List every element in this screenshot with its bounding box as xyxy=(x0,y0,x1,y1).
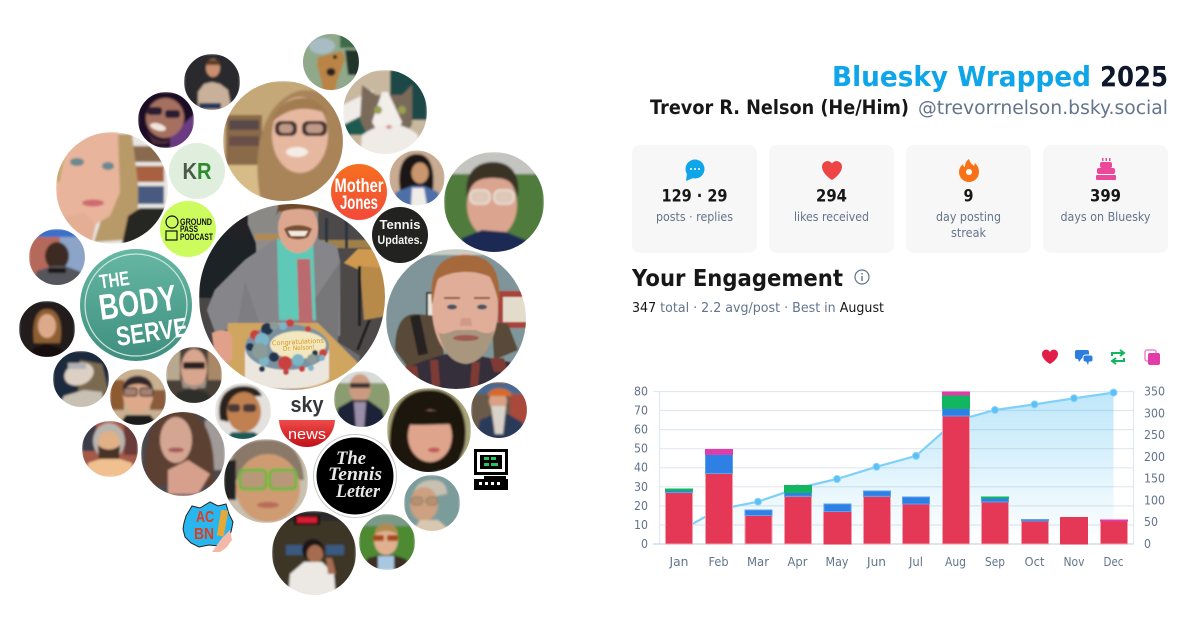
avatar: Sky News logo: sky xyxy=(290,392,324,417)
avatar: Mother Jones logo: Jones xyxy=(340,193,378,214)
stat card: posts and replies xyxy=(632,145,757,253)
title: Bluesky Wrapped xyxy=(832,60,1091,93)
left axis labels: 20 xyxy=(634,499,648,513)
stacked bars xyxy=(666,392,1128,544)
stat card: posting streak: 9 xyxy=(964,186,974,206)
avatar: man with clear glasses, hedge xyxy=(444,152,544,256)
right axis labels: 0 xyxy=(1144,537,1151,551)
avatar: Tennis Updates logo: Tennis xyxy=(380,217,420,232)
avatar: woman with green glasses and headphones xyxy=(224,439,308,523)
display name: Trevor R. Nelson (He/Him) xyxy=(650,96,909,119)
icon: quotes legend xyxy=(1145,350,1160,365)
avatar: Ground Pass Podcast logo: GROUND xyxy=(180,217,212,227)
stat card: posts and replies: posts · replies xyxy=(656,209,733,224)
avatar: bald man with beard, bookshelf xyxy=(166,347,222,404)
avatar: AC BN comic logo xyxy=(183,502,233,552)
left axis labels: 60 xyxy=(634,422,648,436)
stat card: days on Bluesky: days on Bluesky xyxy=(1060,209,1151,224)
avatar: The Body Serve logo: SERVE xyxy=(114,312,190,352)
left axis labels: 40 xyxy=(634,460,648,474)
avatar: Tennis Updates logo xyxy=(372,207,428,263)
icon: replies legend xyxy=(1075,350,1093,365)
avatar: KR initials: KR xyxy=(182,158,212,184)
right axis labels: 250 xyxy=(1144,428,1165,442)
engagement chart xyxy=(634,384,1165,569)
avatar: Mother Jones logo xyxy=(331,164,387,220)
month labels: Jul xyxy=(908,555,923,569)
avatar: Ground Pass Podcast logo xyxy=(160,201,216,257)
cumulative area xyxy=(679,393,1114,544)
avatar: man in dark studio xyxy=(184,54,240,112)
grid lines xyxy=(653,392,1134,544)
icon: flame xyxy=(959,159,979,182)
right axis labels: 50 xyxy=(1144,515,1158,529)
stat card: days on Bluesky xyxy=(1043,145,1168,253)
avatar: main profile photo with cake: Congratulations xyxy=(272,337,325,347)
avatar: bald man with glasses, purple xyxy=(138,92,194,148)
avatar: woman laughing in studio xyxy=(272,511,356,600)
left axis labels: 80 xyxy=(634,384,648,398)
avatar: woman with wavy brown hair xyxy=(141,410,225,496)
icon: info xyxy=(855,270,869,284)
stat card: likes received: likes received xyxy=(794,209,869,224)
avatar: person laughing upward xyxy=(53,351,109,408)
left axis labels: 70 xyxy=(634,404,648,418)
avatar: Ground Pass Podcast logo: PASS xyxy=(180,224,198,234)
avatar: woman with long dark hair xyxy=(389,150,445,206)
right axis labels: 300 xyxy=(1144,406,1165,420)
avatar: Sky News logo: news xyxy=(288,426,326,443)
avatar: The Body Serve logo xyxy=(80,249,192,361)
right axis labels: 150 xyxy=(1144,472,1165,486)
left axis labels: 0 xyxy=(641,537,648,551)
avatar: The Body Serve logo: THE xyxy=(98,268,131,294)
icon: pixel computer avatar xyxy=(474,449,508,490)
avatar: woman with glasses, bookshelf xyxy=(223,81,344,206)
avatar: Tennis Updates logo: Updates. xyxy=(378,233,422,247)
month labels: Feb xyxy=(708,555,728,569)
right axis labels: 350 xyxy=(1144,384,1165,398)
month labels: Dec xyxy=(1104,555,1124,569)
icon: heart xyxy=(822,161,842,180)
left axis labels: 10 xyxy=(634,518,648,532)
month labels: Nov xyxy=(1064,555,1084,569)
avatar: woman on dark background xyxy=(19,301,75,358)
avatar: main profile photo with cake: Dr. Nelson! xyxy=(283,343,315,353)
month labels: Jun xyxy=(866,555,886,569)
avatar: The Body Serve logo: BODY xyxy=(96,277,179,328)
avatar: KR initials xyxy=(169,143,225,199)
heading: Your Engagement: Your Engagement xyxy=(631,264,843,292)
cumulative line xyxy=(679,393,1114,531)
avatar: main profile photo with cake xyxy=(199,202,390,390)
stat card: likes received: 294 xyxy=(816,186,847,206)
avatar bubble cluster xyxy=(19,32,544,600)
icon: reposts legend xyxy=(1112,350,1124,364)
stat card: posting streak: streak xyxy=(951,225,987,240)
avatar: bald man in suit xyxy=(334,371,390,428)
month labels: Aug xyxy=(945,555,966,569)
avatar: person with light hair and round glasses xyxy=(404,475,460,532)
left axis labels: 50 xyxy=(634,442,648,456)
icon: chat bubble xyxy=(686,160,704,181)
avatar: woman with dark bangs xyxy=(387,388,471,474)
avatar: bearded man in orange hat xyxy=(471,382,528,440)
avatar: Sky News logo xyxy=(279,396,335,447)
avatar: tabby cat xyxy=(343,70,427,157)
left axis labels xyxy=(634,384,648,551)
avatar: bearded cartoon mascot xyxy=(82,421,138,477)
right axis labels: 200 xyxy=(1144,450,1165,464)
icon: birthday cake xyxy=(1096,158,1116,180)
left axis labels: 30 xyxy=(634,480,648,494)
avatar: AC BN comic logo: BN xyxy=(194,526,214,543)
avatar: The Tennis Letter logo: The xyxy=(336,448,367,469)
stat card: posts and replies: 129 · 29 xyxy=(662,186,728,206)
chart legend xyxy=(1042,350,1160,365)
title: 2025 xyxy=(1100,60,1168,93)
avatar: The Tennis Letter logo: Tennis xyxy=(328,464,382,485)
month labels: Mar xyxy=(747,555,769,569)
avatar: man in plaid shirt xyxy=(386,249,528,394)
avatar: The Tennis Letter logo xyxy=(314,434,396,518)
stat card: days on Bluesky: 399 xyxy=(1090,186,1121,206)
month labels: May xyxy=(826,555,848,569)
month labels: Oct xyxy=(1024,555,1045,569)
avatar: blonde woman, bookshelf xyxy=(56,132,168,244)
stat card: likes received xyxy=(769,145,894,253)
handle: @trevorrnelson.bsky.social xyxy=(918,98,1168,119)
stat card: posting streak: day posting xyxy=(936,209,1001,224)
icon: likes legend heart xyxy=(1042,350,1058,364)
engagement summary: 347 total · 2.2 avg/post · Best in August xyxy=(632,300,884,316)
avatar: The Tennis Letter logo: Letter xyxy=(335,481,381,502)
month labels: Apr xyxy=(788,555,808,569)
avatar: AC BN comic logo: AC xyxy=(196,509,214,526)
avatar: Mother Jones logo: Mother xyxy=(334,176,384,197)
cumulative markers xyxy=(754,389,1117,505)
right axis labels: 100 xyxy=(1144,494,1165,508)
avatar: man in grey hoodie xyxy=(29,229,86,287)
avatar: woman with glasses, pursed lips xyxy=(215,383,271,440)
month labels xyxy=(668,555,1124,569)
avatar: Ground Pass Podcast logo: PODCAST xyxy=(180,232,213,242)
avatar: smiling man with glasses xyxy=(110,369,166,426)
avatar: man with sunglasses, green field xyxy=(359,514,415,570)
avatar: dog xyxy=(303,34,359,90)
month labels: Jan xyxy=(668,555,688,569)
stat card: posting streak xyxy=(906,145,1031,253)
month labels: Sep xyxy=(985,555,1005,569)
right axis labels xyxy=(1144,384,1165,551)
